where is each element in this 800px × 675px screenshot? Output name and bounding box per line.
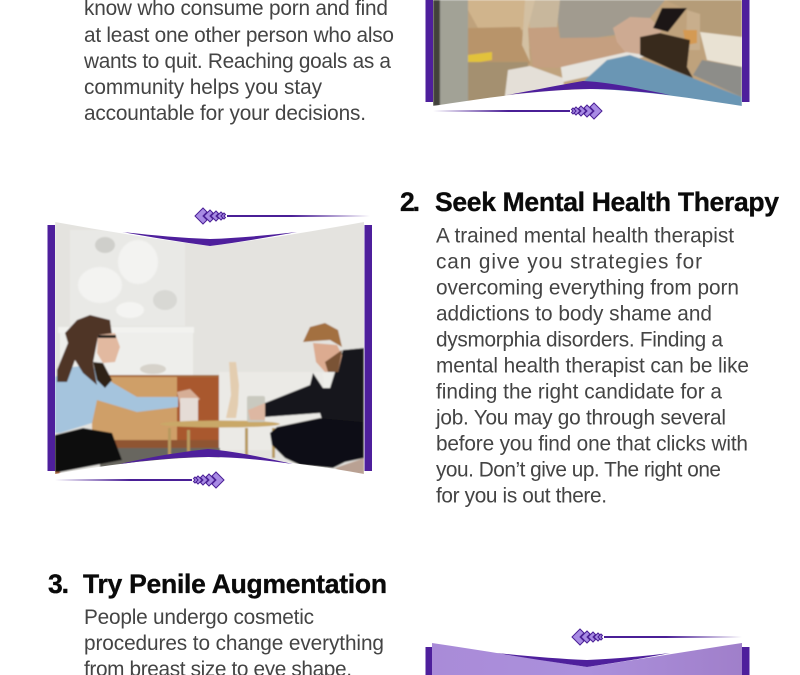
step 1 body text: accountable for your decisions. — [84, 102, 366, 125]
curved purple band top — [122, 232, 297, 246]
top line and chevrons — [195, 208, 370, 224]
step 3 heading: 3. — [48, 569, 69, 599]
step 2 body text: you. Don’t give up. The right one — [436, 458, 721, 482]
step 2 body text: for you is out there. — [436, 484, 607, 508]
step 3 body text — [84, 606, 384, 675]
step 2 body text: A trained mental health therapist — [436, 224, 734, 248]
step 1 body text: wants to quit. Reaching goals as a — [83, 50, 391, 73]
step 2 body text: dysmorphia disorders. Finding a — [436, 328, 723, 352]
step 2 body text: job. You may go through several — [435, 406, 726, 430]
photo frame: man on sofa with phone — [426, 0, 750, 119]
step 2 body text — [435, 224, 749, 508]
lavender fill — [432, 643, 742, 675]
step 2 heading: 2. — [400, 187, 420, 217]
photo: woman and man at table — [55, 220, 365, 476]
step 3 heading: Try Penile Augmentation — [83, 569, 387, 599]
step 2 body text: mental health therapist can be like — [436, 354, 749, 378]
step 2 body text: before you find one that clicks with — [436, 432, 748, 456]
step 1 body text: at least one other person who also — [84, 24, 394, 47]
top line and chevrons — [572, 629, 742, 645]
step 2 heading: Seek Mental Health Therapy — [435, 187, 779, 217]
curved purple band bottom — [507, 81, 670, 95]
line and chevrons — [433, 103, 602, 119]
photo: man holding phone among boxes — [433, 0, 742, 107]
step 2 body text: finding the right candidate for a — [436, 380, 722, 404]
step 3 body text: People undergo cosmetic — [84, 606, 314, 629]
bottom line and chevrons — [55, 472, 224, 488]
photo frame: lavender panel — [426, 629, 750, 675]
step 2 body text: addictions to body shame and — [436, 302, 712, 326]
step 2 body text: can give you strategies for — [436, 250, 702, 274]
photo frame: therapy session — [48, 208, 372, 488]
step 1 body text — [83, 0, 394, 125]
step 1 body text: community helps you stay — [84, 76, 323, 99]
curved purple band top — [497, 653, 670, 667]
step 3 body text: procedures to change everything — [84, 632, 384, 655]
step 2 body text: overcoming everything from porn — [436, 276, 739, 300]
curved purple band bottom — [120, 449, 293, 464]
